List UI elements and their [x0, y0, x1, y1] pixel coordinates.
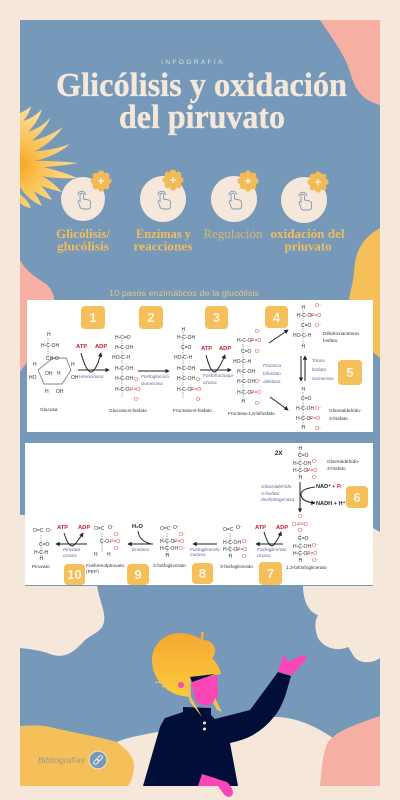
reaction: phosphoglycerate kinase: ADP	[276, 525, 288, 531]
hair strand front	[185, 677, 202, 717]
molecule: phosphoenolpyruvate: Fosfoenolpiruvato	[86, 563, 124, 569]
step badge 2: 2	[147, 310, 155, 325]
molecule: 1,3-bisphosphoglycerate: H-C-O-	[293, 551, 309, 557]
step badge 4	[265, 306, 288, 328]
step badge 4: 4	[273, 310, 281, 325]
molecule: 3-phosphoglycerate: H-C-OH	[223, 540, 241, 546]
molecule: 1,3-bisphosphoglycerate: O-P=O	[292, 522, 308, 528]
molecule: phosphoenolpyruvate: H	[94, 552, 98, 558]
molecule: phosphoenolpyruvate: O⁻	[114, 546, 121, 552]
title: Glicólisis y oxidación	[56, 67, 347, 104]
molecule: phosphoenolpyruvate: O⁻	[108, 525, 115, 531]
molecule: glucose-6-phosphate: Glucosa-6-fosfato	[109, 408, 147, 414]
step badge 3: 3	[213, 310, 220, 325]
molecule: glyceraldehyde-3-phosphate: P=O	[310, 416, 320, 422]
palm leaf decoration	[20, 106, 78, 208]
lower blue background with clouds	[20, 585, 380, 786]
molecule: glucose: Glucosa	[40, 407, 58, 413]
reaction: aldolase	[263, 330, 288, 410]
molecule: glyceraldehyde-3-phosphate: H-C-OH	[296, 406, 314, 412]
molecule: pyruvate: Piruvato	[32, 564, 50, 570]
molecule: 3-phosphoglycerate: H-C-O-	[223, 547, 239, 553]
step badge 6	[346, 486, 368, 508]
molecule: pyruvate: H	[40, 556, 44, 562]
molecule: glucose-6-phosphate: H-C-O-	[115, 387, 131, 393]
icon: pointing hand	[158, 191, 171, 209]
molecule: fructose-1,6-bisphosphate: O⁻	[255, 329, 262, 335]
molecule: fructose-6-phosphate: P=O	[191, 387, 201, 393]
molecule: dihydroxyacetone phosphate: O⁻	[315, 323, 322, 329]
molecule: 3-phosphoglycerate: O=C	[223, 527, 234, 533]
label: Regulación	[204, 226, 263, 241]
panel: glycolysis steps 1-5	[27, 300, 373, 432]
step badge 8: 8	[199, 566, 206, 581]
reaction: GAPDH: deshidrogenasa	[261, 497, 295, 502]
reaction: GAPDH: + Pᵢ	[332, 484, 342, 490]
molecule: glucose-6-phosphate: H-C-OH	[115, 366, 133, 372]
reaction: phosphoglycerate kinase: cinasa	[257, 553, 271, 558]
yellow blob right	[349, 228, 380, 358]
molecule: phosphoenolpyruvate: (PEP)	[86, 569, 99, 575]
icon: link	[89, 751, 107, 769]
step badge 9: 9	[134, 567, 142, 582]
title: del piruvato	[119, 99, 285, 136]
molecule: dihydroxyacetone phosphate: fosfato	[323, 338, 338, 344]
molecule: glyceraldehyde-3-phosphate: C=O	[301, 396, 312, 402]
reaction: aldolase: bifosfato	[263, 371, 281, 376]
bibliography link	[38, 751, 107, 769]
label: reacciones	[134, 238, 192, 254]
molecule: 1,3-bisphosphoglycerate: O⁻	[298, 514, 305, 520]
molecule: fructose-1,6-bisphosphate: Fructosa-1,6-bifosfato	[228, 411, 275, 417]
molecule: 2-phosphoglycerate: 2-fosfoglicerato	[153, 563, 186, 569]
molecule: glucose: OH	[56, 389, 64, 395]
molecule: phosphoenolpyruvate: O⁻	[114, 532, 121, 538]
icon: pointing hand	[229, 191, 242, 209]
reaction: triose phosphate isomerase	[301, 356, 334, 381]
face	[191, 675, 218, 705]
reaction: hexokinase: ATP	[76, 344, 87, 350]
molecule: fructose-6-phosphate: H	[182, 327, 186, 333]
step badge 5	[338, 360, 362, 385]
molecule: glucose-6-phosphate: H-C-OH	[115, 376, 133, 382]
reaction: phosphofructokinase: ATP	[201, 346, 212, 352]
molecule: fructose-1,6-bisphosphate: P=O	[251, 338, 261, 344]
reaction: GAPDH: NAD⁺	[316, 483, 331, 490]
molecule: 3-phosphoglycerate: O⁻	[242, 554, 249, 560]
reaction: GAPDH: NADH + H⁺	[316, 500, 346, 507]
reaction: pyruvate kinase: ATP	[57, 525, 68, 531]
molecule: fructose-6-phosphate: HO-C-H	[174, 355, 192, 361]
icon: plus flower	[90, 170, 112, 192]
pink hill	[320, 716, 380, 786]
step badge 9	[127, 564, 149, 585]
molecule: 2-phosphoglycerate: H	[166, 553, 170, 559]
reaction: phosphoglycerate kinase: ATP	[255, 525, 266, 531]
molecule: 2-phosphoglycerate: O=C	[160, 526, 171, 532]
fringe band	[190, 674, 215, 682]
molecule: 1,3-bisphosphoglycerate: O⁻	[312, 558, 319, 564]
molecule: glucose-6-phosphate: P=O	[130, 387, 140, 393]
molecule: fructose-1,6-bisphosphate: H-C-O-	[237, 338, 253, 344]
step badge 5: 5	[346, 365, 354, 380]
reaction: phosphofructokinase: ADP	[219, 346, 231, 352]
label	[56, 226, 110, 254]
molecule: dihydroxyacetone phosphate: H-C-O-	[297, 313, 313, 319]
molecule: glyceraldehyde-3-phosphate: P=O	[307, 468, 317, 474]
molecule: pyruvate: C=O	[39, 542, 50, 548]
molecule: glucose: H	[57, 371, 61, 377]
molecule: glyceraldehyde-3-phosphate: H	[302, 425, 306, 431]
label: Enzimas y	[136, 226, 191, 241]
molecule: fructose-6-phosphate: C=O	[181, 345, 192, 351]
reaction: phosphoglycerate mutase: Fosfoglicerato	[190, 547, 220, 552]
label	[270, 226, 345, 254]
multiplier 2X: 2X	[275, 451, 282, 457]
label	[134, 226, 192, 254]
molecule: fructose-6-phosphate	[173, 327, 212, 414]
molecule: 1,3-bisphosphoglycerate: O⁻	[312, 543, 319, 549]
step badge 7	[259, 562, 282, 585]
button: oxidación del piruvato	[270, 171, 345, 254]
molecule: pyruvate: H-C-H	[34, 550, 49, 556]
molecule: 2-phosphoglycerate: O⁻	[173, 525, 180, 531]
label: priuvato	[284, 238, 332, 254]
reaction: hexokinase: ADP	[95, 344, 107, 350]
molecule: fructose-1,6-bisphosphate: O⁻	[255, 349, 262, 355]
molecule: 2-phosphoglycerate: P=O	[174, 539, 184, 545]
step badge 2	[139, 306, 163, 329]
label: oxidación del	[270, 226, 345, 241]
molecule: glyceraldehyde-3-phosphate	[296, 387, 362, 432]
hair	[152, 632, 221, 697]
molecule: fructose-6-phosphate: H-C-OH	[177, 366, 195, 372]
pink blob top right	[320, 20, 380, 105]
molecule: 1,3-bisphosphoglycerate: H	[298, 558, 302, 564]
molecule: phosphoenolpyruvate	[86, 525, 124, 575]
hair ties	[155, 682, 170, 687]
lower hand	[198, 774, 233, 797]
molecule: 1,3-bisphosphoglycerate	[286, 514, 327, 571]
button: Enzimas y reacciones	[134, 169, 192, 254]
molecule: 1,3-bisphosphoglycerate: H-C-OH	[293, 544, 311, 550]
reaction: hexokinase	[76, 344, 109, 379]
label: Glicólisis/	[56, 226, 110, 241]
molecule: glyceraldehyde-3-phosphate: O⁻	[315, 426, 322, 432]
reaction: GAPDH: Gliceraldehído-	[261, 484, 293, 489]
molecule: glyceraldehyde-3-phosphate	[293, 446, 360, 481]
molecule: glucose: CH-O	[46, 356, 59, 362]
molecule: glyceraldehyde-3-phosphate: H	[298, 446, 302, 452]
bibliography link: Bibliografías	[38, 756, 85, 765]
molecule: fructose-6-phosphate: H-C-OH	[177, 376, 195, 382]
molecule: fructose-6-phosphate: H-C-O-	[177, 387, 193, 393]
molecule: glyceraldehyde-3-phosphate: Gliceraldehído-	[329, 408, 362, 414]
hair strand side	[213, 698, 222, 712]
reaction: phosphoglycerate kinase	[255, 525, 288, 558]
molecule: 1,3-bisphosphoglycerate: 1,3-bifosfoglicerato	[286, 565, 327, 571]
molecule: fructose-1,6-bisphosphate: O⁻	[255, 401, 262, 407]
molecule: glyceraldehyde-3-phosphate: H	[298, 475, 302, 481]
icon: plus flower	[162, 169, 184, 191]
molecule: glucose-6-phosphate: H-C-OH	[115, 345, 133, 351]
step badge 7: 7	[267, 566, 274, 581]
molecule: glyceraldehyde-3-phosphate: O⁻	[312, 475, 319, 481]
reaction: enolase: H₂O	[132, 524, 144, 530]
molecule: fructose-1,6-bisphosphate: O⁻	[255, 379, 262, 385]
molecule: fructose-1,6-bisphosphate	[228, 329, 275, 417]
molecule: dihydroxyacetone phosphate: H	[302, 344, 306, 350]
molecule: glyceraldehyde-3-phosphate: O⁻	[315, 406, 322, 412]
step badge 3	[205, 306, 228, 329]
molecule: 3-phosphoglycerate: O⁻	[236, 525, 243, 531]
panel: glycolysis steps 6-10	[25, 443, 373, 585]
molecule: 3-phosphoglycerate: O⁻	[242, 539, 249, 545]
reaction: phosphofructokinase: Fosfofructoqui-	[203, 373, 235, 378]
buttons	[203, 722, 206, 730]
ear	[178, 682, 184, 688]
reaction: phosphoglycerate mutase	[190, 544, 220, 557]
cream hill	[117, 717, 345, 786]
molecule: 1,3-bisphosphoglycerate: C=O	[298, 536, 309, 542]
reaction: hexokinase: Hexocinasa	[79, 374, 104, 379]
reaction: triose phosphate isomerase: fosfato	[312, 367, 326, 372]
molecule: glucose: H-C-OH	[41, 343, 59, 349]
molecule: glyceraldehyde-3-phosphate: H-C-O-	[296, 416, 312, 422]
step badge 8	[192, 563, 213, 584]
molecule: 3-phosphoglycerate: 3-fosfoglicerato	[220, 564, 253, 570]
molecule: glyceraldehyde-3-phosphate: H	[302, 387, 306, 393]
molecule: 2-phosphoglycerate: O⁻	[179, 532, 186, 538]
molecule: 2-phosphoglycerate	[153, 525, 186, 569]
molecule: 1,3-bisphosphoglycerate: P=O	[307, 551, 317, 557]
reaction: pyruvate kinase	[56, 525, 90, 558]
reaction: phosphofructokinase	[200, 346, 235, 385]
molecule: fructose-1,6-bisphosphate: H	[242, 399, 246, 405]
reaction: phosphoglucose isomerase	[138, 371, 169, 386]
section heading: 10 pasos enzimáticos de la glucólisis	[109, 288, 259, 298]
reaction: aldolase: Fructosa	[263, 363, 282, 368]
molecule: glucose: H	[71, 362, 75, 368]
molecule: fructose-1,6-bisphosphate: P=O	[251, 390, 261, 396]
molecule: dihydroxyacetone phosphate	[293, 303, 359, 350]
molecule: 3-phosphoglycerate: P=O	[237, 547, 247, 553]
molecule: glucose: H	[33, 362, 37, 368]
character illustration	[143, 632, 306, 797]
molecule: glucose	[29, 332, 79, 413]
molecule: dihydroxyacetone phosphate: H	[302, 305, 306, 311]
reaction: GAPDH	[261, 482, 346, 512]
molecule: dihydroxyacetone phosphate: C=O	[301, 323, 312, 329]
molecule: dihydroxyacetone phosphate: O⁻	[315, 303, 322, 309]
molecule: glucose: HO	[29, 375, 37, 381]
molecule: 3-phosphoglycerate: H	[228, 554, 232, 560]
molecule: 1,3-bisphosphoglycerate: O⁻	[298, 528, 305, 534]
reaction: aldolase: aldolasa	[263, 379, 281, 384]
step badge 1	[81, 306, 105, 329]
yellow hill	[20, 725, 134, 786]
molecule: phosphoenolpyruvate: O=C	[94, 526, 105, 532]
reaction: phosphoglycerate kinase: Fosfoglicerato	[257, 547, 287, 552]
button: Regulación	[204, 170, 263, 241]
molecule: phosphoenolpyruvate: P=O	[110, 539, 120, 545]
molecule: glucose-6-phosphate: HO-C-H	[112, 355, 130, 361]
reaction: phosphoglucose isomerase: Fosfoglucosa	[141, 374, 169, 379]
icon: plus flower	[307, 171, 329, 193]
reaction: pyruvate kinase: Piruvato	[63, 547, 81, 552]
button: Glicólisis	[56, 170, 112, 254]
icon: pointing hand	[299, 192, 312, 210]
reaction: triose phosphate isomerase: Triosa	[312, 358, 325, 363]
molecule: dihydroxyacetone phosphate: Dihidroxiacetona	[323, 331, 359, 337]
molecule: glucose-6-phosphate: H-C=O	[115, 335, 131, 341]
label: glucólisis	[57, 238, 109, 254]
molecule: glyceraldehyde-3-phosphate: H-C-OH	[293, 461, 311, 467]
reaction: GAPDH: 3-fosfato	[261, 491, 280, 496]
molecule: glyceraldehyde-3-phosphate: 3-fosfato	[327, 466, 346, 472]
molecule: fructose-1,6-bisphosphate: H-C-OH	[237, 379, 255, 385]
molecule: glucose: H	[45, 389, 49, 395]
molecule: phosphoenolpyruvate: H	[107, 552, 111, 558]
step badge 10	[64, 564, 85, 585]
molecule: 2-phosphoglycerate: H-C-O-	[160, 539, 176, 545]
molecule: fructose-6-phosphate: O⁻	[196, 377, 203, 383]
molecule: dihydroxyacetone phosphate: P=O	[311, 313, 321, 319]
molecule: glucose: OH	[71, 375, 79, 381]
molecule: dihydroxyacetone phosphate: HO-C-H	[293, 333, 311, 339]
molecule: fructose-1,6-bisphosphate: H-C-O-	[237, 390, 253, 396]
molecule: fructose-1,6-bisphosphate: C=O	[241, 349, 252, 355]
step badge 1: 1	[89, 310, 97, 325]
reaction: phosphoglucose isomerase: isomerasa	[141, 381, 163, 386]
molecule: glyceraldehyde-3-phosphate: O⁻	[312, 459, 319, 465]
body	[143, 672, 291, 786]
molecule: pyruvate	[32, 528, 53, 570]
step badge 6: 6	[353, 490, 361, 505]
molecule: fructose-6-phosphate: O⁻	[196, 397, 203, 403]
molecule: 3-phosphoglycerate	[220, 525, 253, 570]
molecule: glyceraldehyde-3-phosphate: C=O	[298, 453, 309, 459]
molecule: glucose: H	[47, 332, 51, 338]
molecule: fructose-1,6-bisphosphate: HO-C-H	[233, 359, 251, 365]
reaction: phosphoglycerate mutase: mutasa	[190, 552, 206, 557]
molecule: fructose-6-phosphate: H-C-OH	[177, 335, 195, 341]
molecule: glucose-6-phosphate	[109, 335, 147, 414]
molecule: phosphoenolpyruvate: C-O-	[100, 539, 111, 545]
reaction: pyruvate kinase: ADP	[78, 525, 90, 531]
molecule: pyruvate: O=C	[33, 528, 44, 534]
molecule: pyruvate: O⁻	[46, 528, 53, 534]
molecule: fructose-1,6-bisphosphate: H-C-OH	[237, 369, 255, 375]
eyebrow label: INFOGRAFÍA	[161, 57, 225, 66]
raised hand	[278, 655, 306, 675]
pink blob left	[20, 260, 54, 372]
molecule: glucose-6-phosphate: O⁻	[134, 397, 141, 403]
molecule: 2-phosphoglycerate: O⁻	[179, 546, 186, 552]
molecule: glyceraldehyde-3-phosphate: Gliceraldehído-	[327, 459, 360, 465]
icon: plus flower	[237, 170, 259, 192]
molecule: glucose-6-phosphate: O⁻	[134, 377, 141, 383]
reaction: triose phosphate isomerase: isomerasa	[312, 376, 334, 381]
title	[56, 67, 347, 136]
step badge 10: 10	[67, 567, 82, 582]
reaction: enolase	[128, 524, 153, 552]
molecule: glyceraldehyde-3-phosphate: H-C-O-	[293, 468, 309, 474]
molecule: glyceraldehyde-3-phosphate: 3-fosfato	[329, 416, 348, 422]
reaction: enolase: Enolasa	[132, 547, 149, 552]
blue upper background	[20, 20, 380, 586]
icon: pointing hand	[78, 191, 91, 209]
molecule: 2-phosphoglycerate: H-C-OH	[160, 546, 178, 552]
reaction: pyruvate kinase: cinasa	[63, 553, 77, 558]
reaction: phosphofructokinase: cinasa	[203, 380, 217, 385]
molecule: glucose: OH	[45, 371, 53, 377]
molecule: fructose-6-phosphate: Fructosa-6-fosfato	[173, 408, 212, 414]
